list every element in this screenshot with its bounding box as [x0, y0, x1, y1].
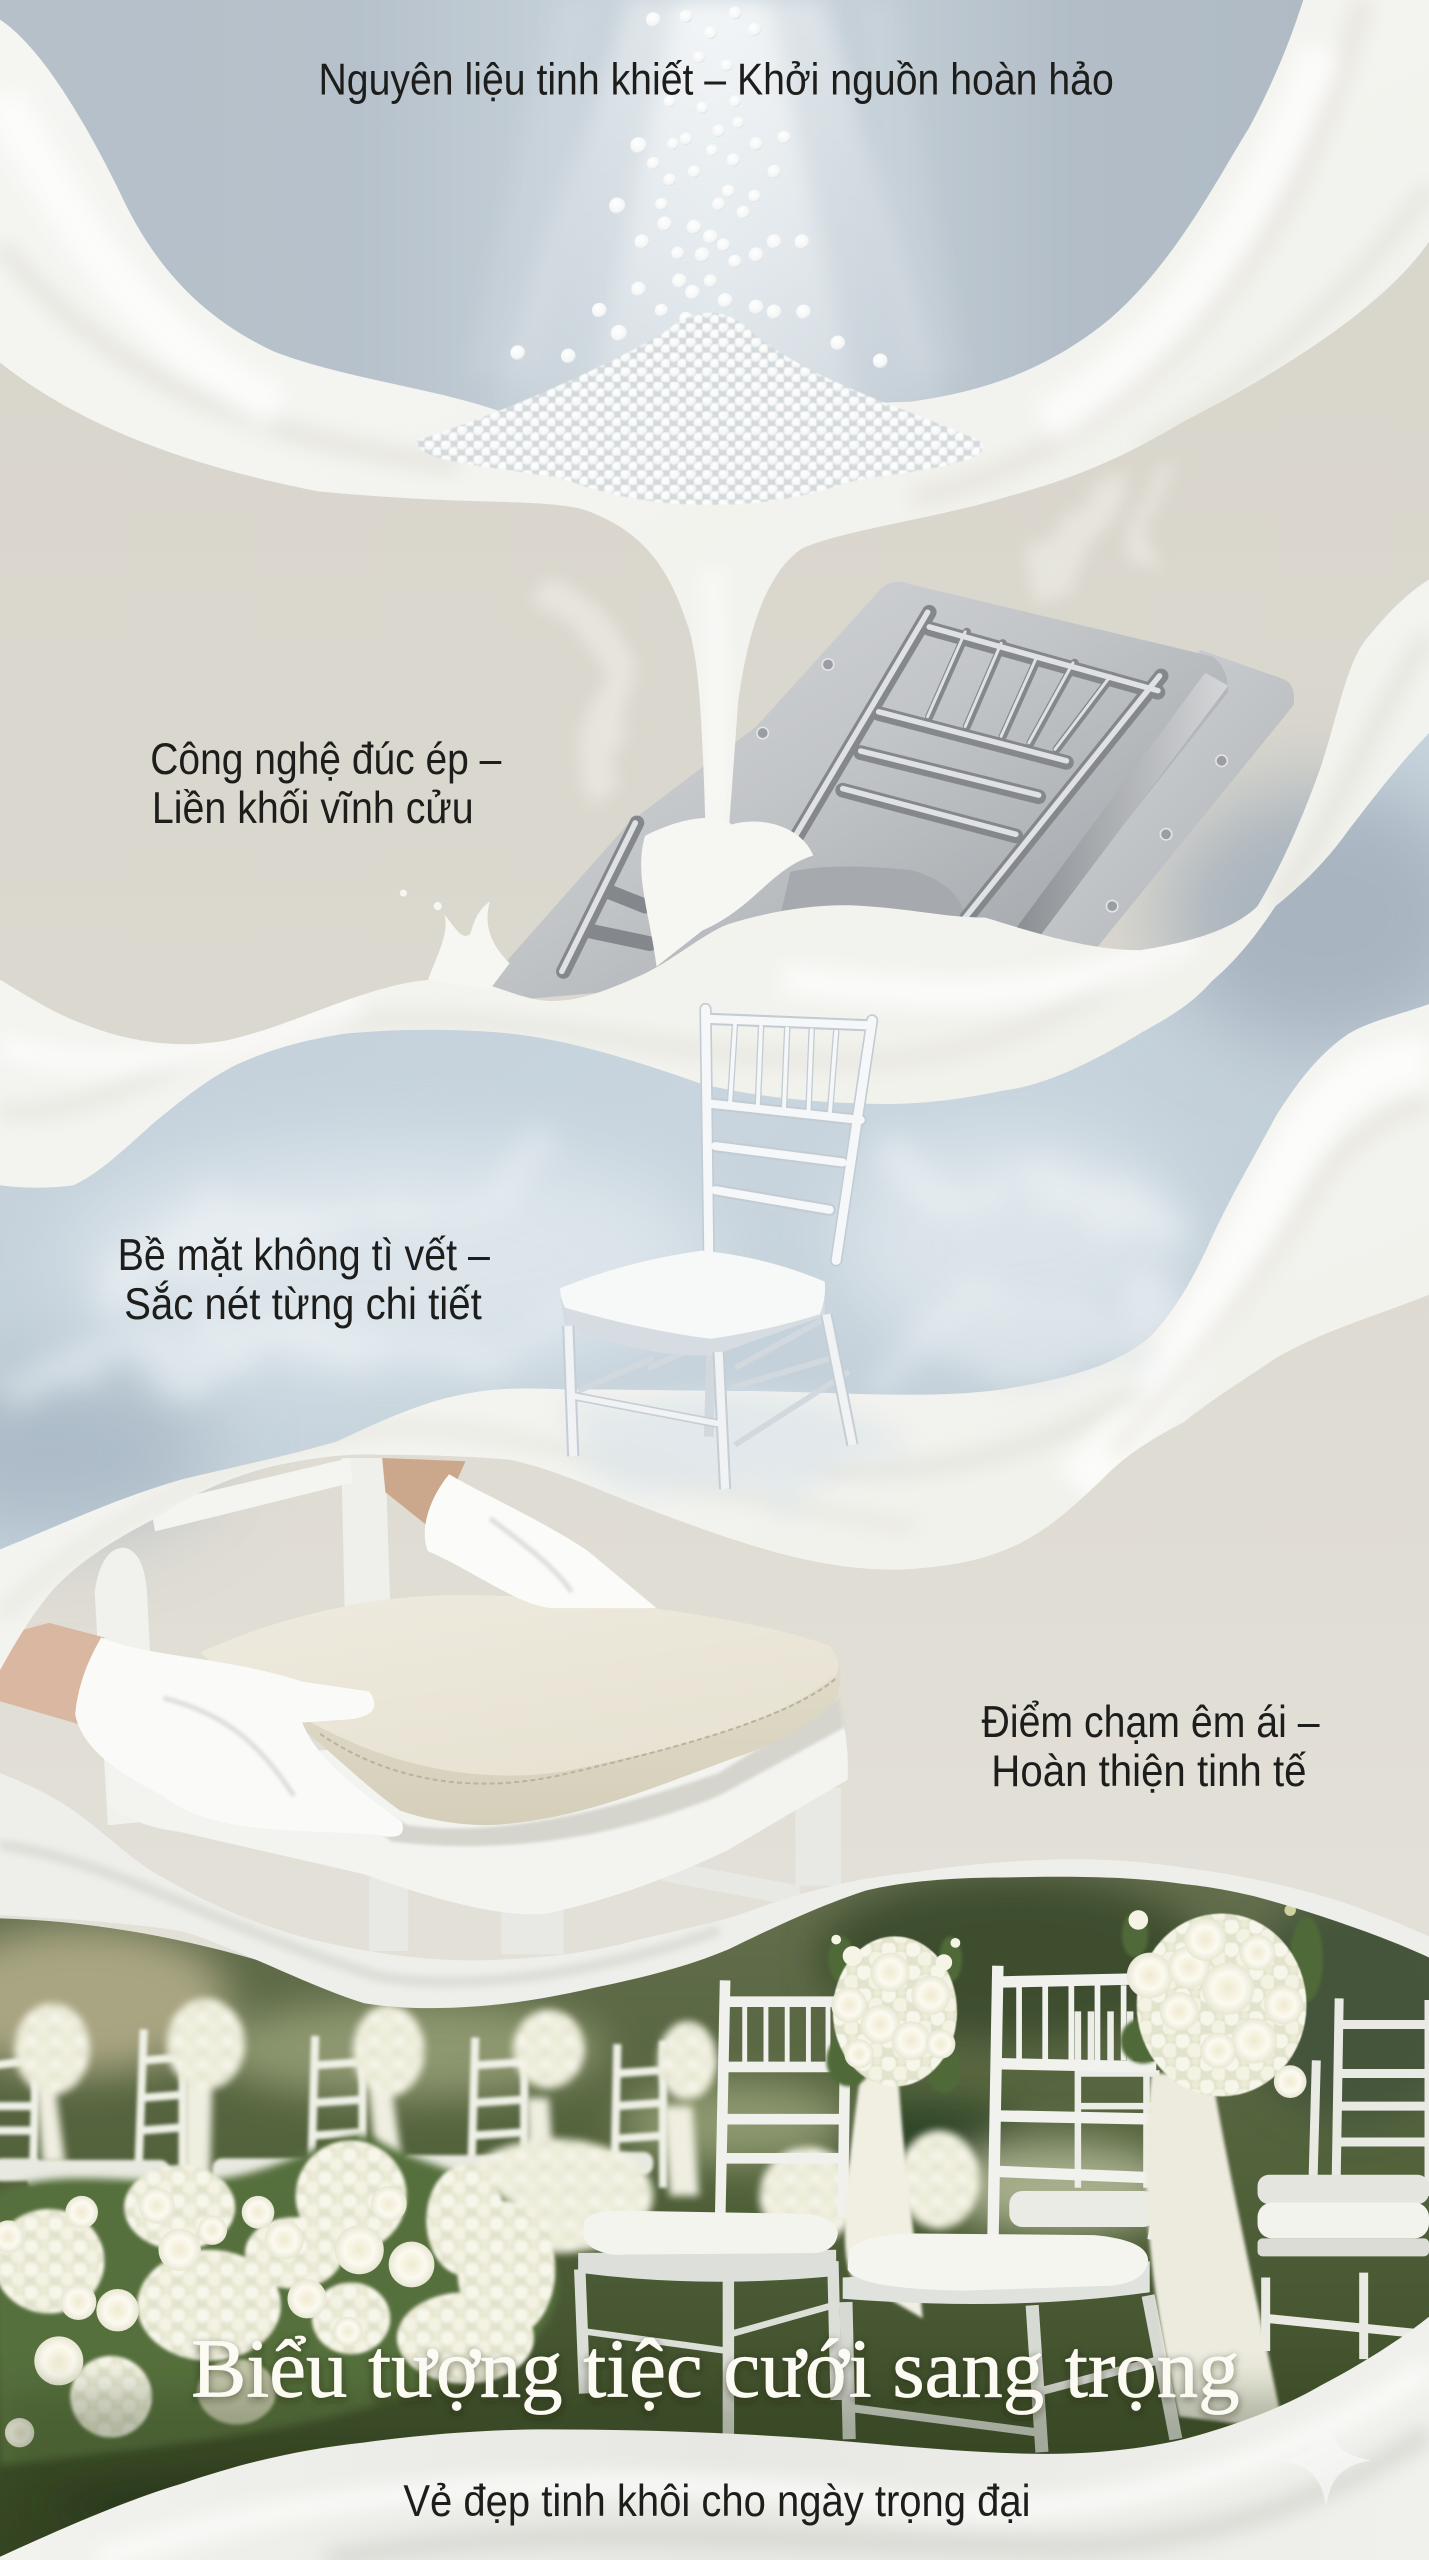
ribbon 5: bottom silk band — [0, 2317, 1429, 2560]
silk body — [0, 580, 1429, 1188]
chair top rail — [150, 1458, 353, 1531]
text block: step 3 caption: Bề mặt không tì vết – — [118, 1231, 490, 1280]
cushion chair with gloved hands — [0, 1458, 848, 1954]
chair seat frame — [109, 1711, 848, 1914]
ribbon 2: middle silk wave — [0, 580, 1429, 1188]
white chiavari chair in fog — [560, 1009, 872, 1489]
ribbon: right bouquet tails — [1146, 2073, 1284, 2429]
text block: step 2 caption: Công nghệ đúc ép – — [150, 735, 502, 784]
heading: step 1 caption: Nguyên liệu tinh khiết – Khởi nguồn hoàn hảo — [318, 56, 1114, 105]
milk splash — [400, 889, 510, 989]
illustration: steel chair mold — [492, 582, 1294, 1000]
text block: step 4 caption — [982, 1698, 1320, 1796]
mold front plate — [492, 582, 1228, 1000]
chair front legs — [568, 1314, 853, 1489]
silk body — [0, 1773, 1429, 2008]
title: Biểu tượng tiệc cưới sang trọng — [191, 2324, 1240, 2416]
sky backdrop 2 — [0, 686, 1429, 1567]
chair back shading — [706, 1009, 872, 1260]
fog wisps — [0, 1143, 1176, 1388]
cushion top face — [201, 1595, 838, 1776]
grass shadow — [0, 2392, 1429, 2560]
chair front legs shading — [568, 1314, 853, 1489]
mold bolts — [757, 659, 1227, 912]
chair back left post — [95, 1548, 158, 1825]
text block: step 4 caption: Hoàn thiện tinh tế — [991, 1747, 1307, 1796]
garden backdrop — [0, 1845, 1429, 2560]
silk body — [0, 1004, 1429, 1670]
silk body — [0, 0, 1429, 836]
silk folds — [0, 637, 1429, 1112]
icon: sparkle star — [1280, 2415, 1372, 2506]
background seats — [0, 2152, 653, 2186]
panel: sky with light beams and falling beads — [0, 0, 1429, 473]
text block: step 4 caption: Điểm chạm êm ái – — [982, 1698, 1320, 1747]
subtitle: Vẻ đẹp tinh khôi cho ngày trọng đại — [403, 2477, 1031, 2526]
silk folds — [0, 1061, 1429, 1616]
text block: step 3 caption — [118, 1231, 490, 1329]
silk fold — [0, 1845, 719, 1982]
foreground chair: left — [578, 1980, 846, 2434]
chair rear legs — [578, 1314, 849, 1445]
text block: step 2 caption — [150, 735, 502, 833]
ribbon 4: thin wave above garden — [0, 1773, 1429, 2008]
cushion seam — [320, 1678, 836, 1784]
dark corners of sky — [0, 784, 1429, 1535]
chair: far right pair — [1258, 1998, 1429, 2359]
ribbon 3: large wave with fold — [0, 1004, 1429, 1670]
glove: lower left hand — [75, 1638, 403, 1837]
mold back plate — [1013, 650, 1294, 947]
blurred foliage — [0, 1878, 1429, 2542]
upper arm — [382, 1458, 465, 1531]
sky backdrop — [0, 0, 1429, 473]
puddle of molten material on mold — [641, 818, 813, 967]
blurred white flowers behind the seats — [457, 2131, 980, 2253]
text block: step 2 caption: Liền khối vĩnh cửu — [152, 784, 474, 833]
light beams — [465, 0, 964, 408]
pellet pile — [416, 313, 983, 505]
mold seat recess — [781, 866, 967, 934]
falling beads — [510, 7, 888, 368]
left arm — [0, 1623, 105, 1724]
white flower masses — [0, 2140, 555, 2438]
steam: smoke above mold — [547, 465, 1169, 800]
frame shadow under cushion — [310, 1698, 844, 1846]
silk folds — [0, 0, 1429, 824]
cushion side band — [201, 1595, 841, 1825]
glove: upper right hand — [425, 1474, 657, 1608]
foreground chair: right — [843, 1966, 1176, 2452]
cushion — [201, 1595, 841, 1825]
ribbon: left bouquet tails — [845, 2073, 923, 2318]
bouquet: right — [1120, 1904, 1323, 2098]
foreground flower bush — [0, 2135, 557, 2465]
panel: misty blue sky with fog — [0, 686, 1429, 1567]
mold thick side edge — [996, 673, 1228, 955]
silk folds — [98, 2367, 1429, 2560]
panel: wedding garden photo — [0, 1845, 1429, 2560]
text block: step 3 caption: Sắc nét từng chi tiết — [124, 1280, 482, 1329]
chair back posts — [706, 1009, 872, 1260]
fog at the feet of the chair — [572, 1314, 1143, 1491]
mold chair channel highlight — [562, 612, 1160, 971]
background chairs row — [0, 2024, 663, 2204]
background ribbons and bouquets — [15, 1998, 717, 2220]
soft fog base — [65, 1127, 1192, 1371]
mold chair channel dark stroke — [563, 612, 1161, 971]
ribbon 1: silk flowing into molten stream — [0, 0, 1429, 967]
chair seat frame — [560, 1282, 825, 1355]
chair legs and stretcher — [369, 1788, 841, 1954]
silk body — [0, 2317, 1429, 2560]
chair: rear of main pair — [1009, 2011, 1160, 2227]
chair back right post — [341, 1458, 390, 1608]
bouquet: left — [826, 1935, 962, 2093]
glove fold shadow — [163, 1518, 572, 1796]
chair seat cushion — [560, 1251, 825, 1339]
